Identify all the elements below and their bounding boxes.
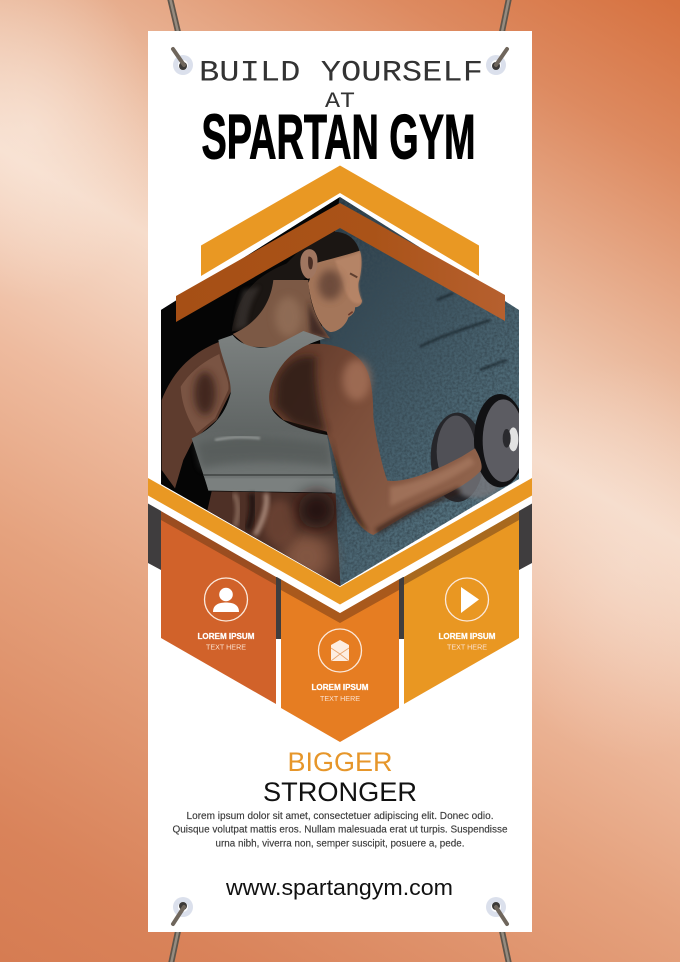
heading: build yourself: BUILD YOURSELF [199, 56, 483, 90]
ear [300, 249, 317, 279]
top hanging ropes [170, 0, 509, 32]
left dark side strip [148, 502, 161, 570]
dark divider left [276, 577, 281, 639]
body paragraph: urna nibh, viverra non, semper suscipit, posuere a, pede. [216, 838, 464, 850]
label: lorem ipsum center: LOREM IPSUM [312, 683, 369, 692]
wall cracks [420, 293, 507, 370]
grommet top left [173, 49, 193, 75]
orange V band below photo [148, 478, 532, 604]
lower back [207, 491, 341, 588]
neck [233, 280, 330, 347]
dark backdrop behind figure [160, 193, 340, 593]
brown translucent chevron [176, 203, 505, 322]
grommet bottom right [486, 897, 507, 924]
top orange chevron [201, 166, 479, 276]
head and face [308, 251, 362, 332]
website url: www.spartangym.com [225, 875, 453, 900]
title: spartan gym: SPARTAN GYM [202, 102, 476, 172]
heading: at: AT [325, 89, 355, 114]
right dark side strip [519, 502, 532, 570]
panel: left orange [161, 511, 276, 704]
photo: athlete with dumbbell in hexagon [160, 193, 526, 593]
body paragraph [172, 811, 508, 850]
grommet bottom left [173, 897, 193, 924]
dark divider right [399, 577, 404, 639]
panel: right orange [404, 511, 519, 704]
grommet top right [486, 49, 507, 75]
hair [232, 232, 360, 332]
dumbbell [431, 394, 526, 502]
bottom hanging ropes [171, 931, 509, 962]
heading: bigger: BIGGER [288, 747, 392, 777]
label: lorem ipsum left: LOREM IPSUM [198, 632, 255, 641]
viewer-right shoulder and arm [267, 344, 482, 535]
sports top [192, 331, 336, 493]
icon: envelope [318, 629, 362, 672]
body paragraph: Quisque volutpat mattis eros. Nullam malesuada erat ut turpis. Suspendisse [172, 824, 508, 836]
white gap band under the photo [148, 495, 532, 613]
panel: center orange [281, 579, 399, 742]
icon: play [446, 578, 488, 621]
viewer-left arm and shoulder [162, 342, 232, 488]
body paragraph: Lorem ipsum dolor sit amet, consectetuer adipiscing elit. Donec odio. [186, 811, 494, 822]
label: text here center: TEXT HERE [320, 694, 360, 703]
label: lorem ipsum right: LOREM IPSUM [438, 632, 496, 641]
banner [148, 31, 532, 932]
label: text here right: TEXT HERE [447, 642, 487, 652]
label: text here left: TEXT HERE [206, 642, 246, 652]
icon: person [204, 578, 248, 621]
heading: stronger: STRONGER [263, 777, 417, 807]
